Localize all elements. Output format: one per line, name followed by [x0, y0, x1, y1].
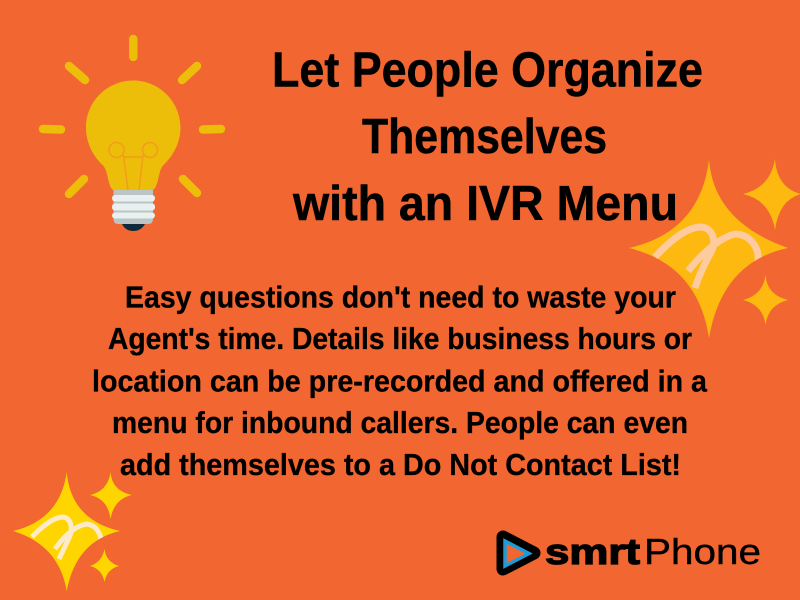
large sparkle	[629, 160, 788, 338]
body text: Agent's time. Details like business hours or	[108, 321, 692, 356]
logo wordmark: Phone	[644, 531, 761, 572]
small sparkle upper	[743, 159, 800, 230]
logo play icon	[503, 537, 534, 569]
icon: light bulb	[43, 39, 221, 231]
body text: Easy questions don't need to waste your	[125, 280, 676, 314]
sparkle cluster: top right	[629, 159, 800, 338]
bulb screw base	[112, 190, 155, 231]
title	[272, 44, 703, 231]
logo wordmark	[545, 531, 761, 572]
logo wordmark: smrt	[545, 531, 640, 572]
title: Themselves	[362, 110, 607, 164]
logo: smrtPhone	[503, 531, 761, 572]
small sparkle upper	[90, 472, 132, 519]
large sparkle	[13, 472, 120, 591]
bulb glass	[86, 80, 180, 190]
sparkle cluster: bottom left	[13, 472, 132, 591]
bulb filament	[109, 142, 158, 190]
title: with an IVR Menu	[292, 177, 678, 231]
small sparkle lower	[743, 275, 788, 325]
small sparkle lower	[90, 549, 119, 582]
bulb rays	[43, 39, 221, 194]
body text: menu for inbound callers. People can even	[112, 405, 688, 440]
body text: location can be pre-recorded and offered in a	[92, 363, 708, 398]
title: Let People Organize	[272, 44, 703, 98]
sparkle highlight	[32, 517, 101, 559]
body text	[92, 280, 708, 482]
body text: add themselves to a Do Not Contact List!	[120, 447, 681, 482]
sparkle highlight	[655, 227, 758, 288]
